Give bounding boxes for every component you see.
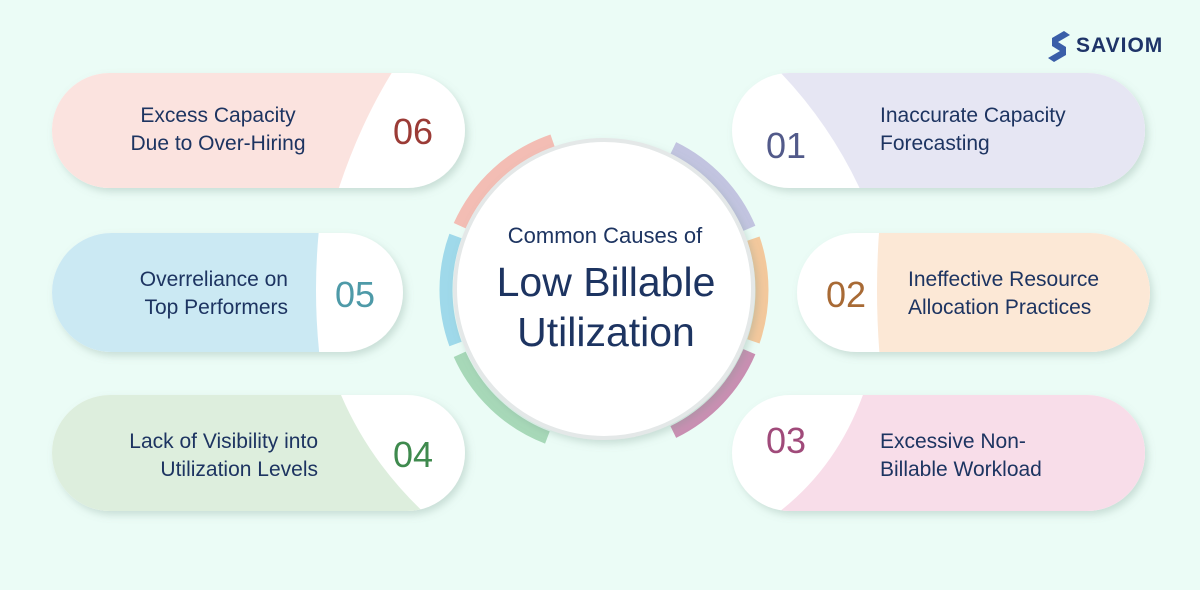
panel 01	[732, 73, 1151, 195]
panel 06	[52, 73, 471, 195]
center circle: Common Causes of	[508, 223, 703, 248]
center circle: Low Billable	[497, 259, 715, 305]
panel 06: Excess Capacity	[140, 104, 296, 127]
panel 05: Overreliance on	[140, 268, 288, 291]
panel 05: Top Performers	[144, 296, 288, 319]
panel 04: 04	[393, 434, 433, 475]
logo	[1048, 31, 1163, 62]
panel 04: Lack of Visibility into	[129, 430, 318, 453]
panel 04	[52, 395, 471, 518]
panel 01: Forecasting	[880, 132, 990, 155]
panel 03: Billable Workload	[880, 458, 1042, 481]
panel 05	[52, 233, 409, 359]
panel 03: Excessive Non-	[880, 430, 1026, 453]
panel 01: Inaccurate Capacity	[880, 104, 1066, 127]
panel 03	[732, 395, 1151, 518]
panel 06: 06	[393, 111, 433, 152]
panel 02: Ineffective Resource	[908, 268, 1099, 291]
panel 02: Allocation Practices	[908, 296, 1091, 319]
center circle	[455, 140, 753, 438]
panel 05: 05	[335, 274, 375, 315]
panel 03: 03	[766, 420, 806, 461]
ring segments	[446, 141, 762, 438]
center circle: Utilization	[517, 309, 695, 355]
panel 04: Utilization Levels	[160, 458, 318, 481]
panel 01: 01	[766, 125, 806, 166]
panel 02	[797, 233, 1156, 359]
panel 06: Due to Over-Hiring	[130, 132, 306, 155]
panel 02: 02	[826, 274, 866, 315]
logo: SAVIOM	[1076, 34, 1163, 57]
